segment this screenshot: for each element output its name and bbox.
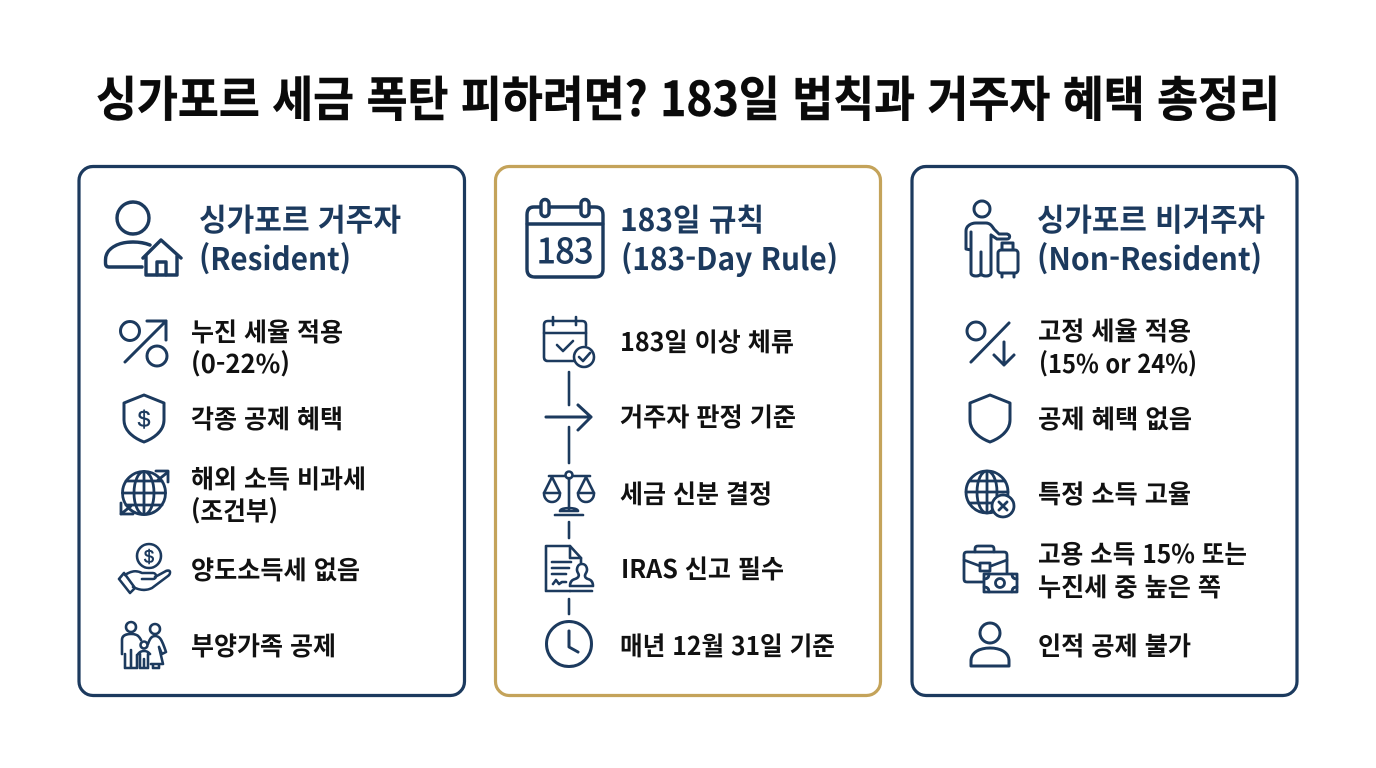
text: employment income: 누진세 중 높은 쪽 (1038, 567, 1221, 604)
text: employment income: 고용 소득 15% 또는 (1038, 534, 1247, 571)
heading: non-resident: (Non-Resident) (1037, 234, 1262, 279)
heading: 183-day rule: 183일 규칙 (620, 195, 764, 240)
text: fixed rate (1038, 311, 1197, 381)
icon: percent with down arrow (967, 322, 1014, 365)
icon: calendar 183: 183 (537, 224, 593, 273)
text: stay 183 days: 183일 이상 체류 (620, 322, 794, 359)
icon: empty shield (970, 395, 1010, 442)
arrow: timeline connector (568, 372, 570, 614)
text: progressive rate (191, 312, 343, 381)
title: 싱가포르 세금 폭탄 피하려면? 183일 법칙과 거주자 혜택 총정리 (96, 60, 1280, 130)
text: foreign income: (조건부) (191, 491, 278, 528)
icon: family (122, 622, 166, 668)
icon: traveller with luggage (966, 201, 1018, 277)
icon: calendar check (544, 317, 594, 367)
text: IRAS filing: IRAS 신고 필수 (621, 549, 784, 586)
text: dependent deduction: 부양가족 공제 (191, 626, 336, 663)
panel: 183-day rule (496, 166, 880, 696)
icon: calendar 183 (527, 200, 603, 277)
heading: resident: (Resident) (199, 234, 351, 279)
panel: resident (79, 166, 464, 696)
icon: hand with coin: $ (144, 547, 154, 567)
text: foreign income (191, 459, 366, 528)
text: employment income (1038, 534, 1247, 604)
icon: arrow right (546, 405, 591, 430)
text: progressive rate: (0-22%) (191, 344, 290, 381)
heading: non-resident (1037, 195, 1265, 279)
heading: resident (199, 195, 401, 279)
text: no deductions: 공제 혜택 없음 (1038, 399, 1192, 436)
text: no capital gains tax: 양도소득세 없음 (191, 550, 360, 587)
icon: person with house (106, 202, 181, 275)
text: tax status: 세금 신분 결정 (620, 474, 772, 511)
text: specific income: 특정 소득 고율 (1038, 474, 1191, 511)
text: progressive rate: 누진 세율 적용 (191, 312, 343, 349)
icon: shield with dollar (124, 395, 164, 442)
icon: scales (544, 472, 594, 515)
text: fixed rate: (15% or 24%) (1039, 344, 1197, 381)
icon: shield with dollar: $ (138, 406, 151, 432)
icon: hand with coin (119, 544, 170, 593)
icon: percent with up arrow (120, 321, 167, 366)
heading: resident: 싱가포르 거주자 (199, 195, 401, 240)
icon: briefcase and cash (964, 546, 1017, 592)
text: residency criteria: 거주자 판정 기준 (620, 397, 796, 434)
text: december 31: 매년 12월 31일 기준 (620, 626, 835, 663)
icon: clock (546, 622, 592, 666)
icon: document with stamp (546, 546, 593, 591)
icon: globe with x badge (966, 471, 1014, 517)
text: no personal relief: 인적 공제 불가 (1038, 626, 1191, 663)
text: foreign income: 해외 소득 비과세 (191, 459, 366, 496)
heading: 183-day rule (620, 195, 838, 279)
text: fixed rate: 고정 세율 적용 (1038, 311, 1191, 348)
text: deductions: 각종 공제 혜택 (191, 399, 343, 436)
icon: person (971, 623, 1009, 666)
icon: globe with arrows (121, 471, 168, 514)
panel: non-resident (912, 166, 1297, 696)
heading: non-resident: 싱가포르 비거주자 (1037, 195, 1265, 240)
heading: 183-day rule: (183-Day Rule) (621, 234, 838, 279)
